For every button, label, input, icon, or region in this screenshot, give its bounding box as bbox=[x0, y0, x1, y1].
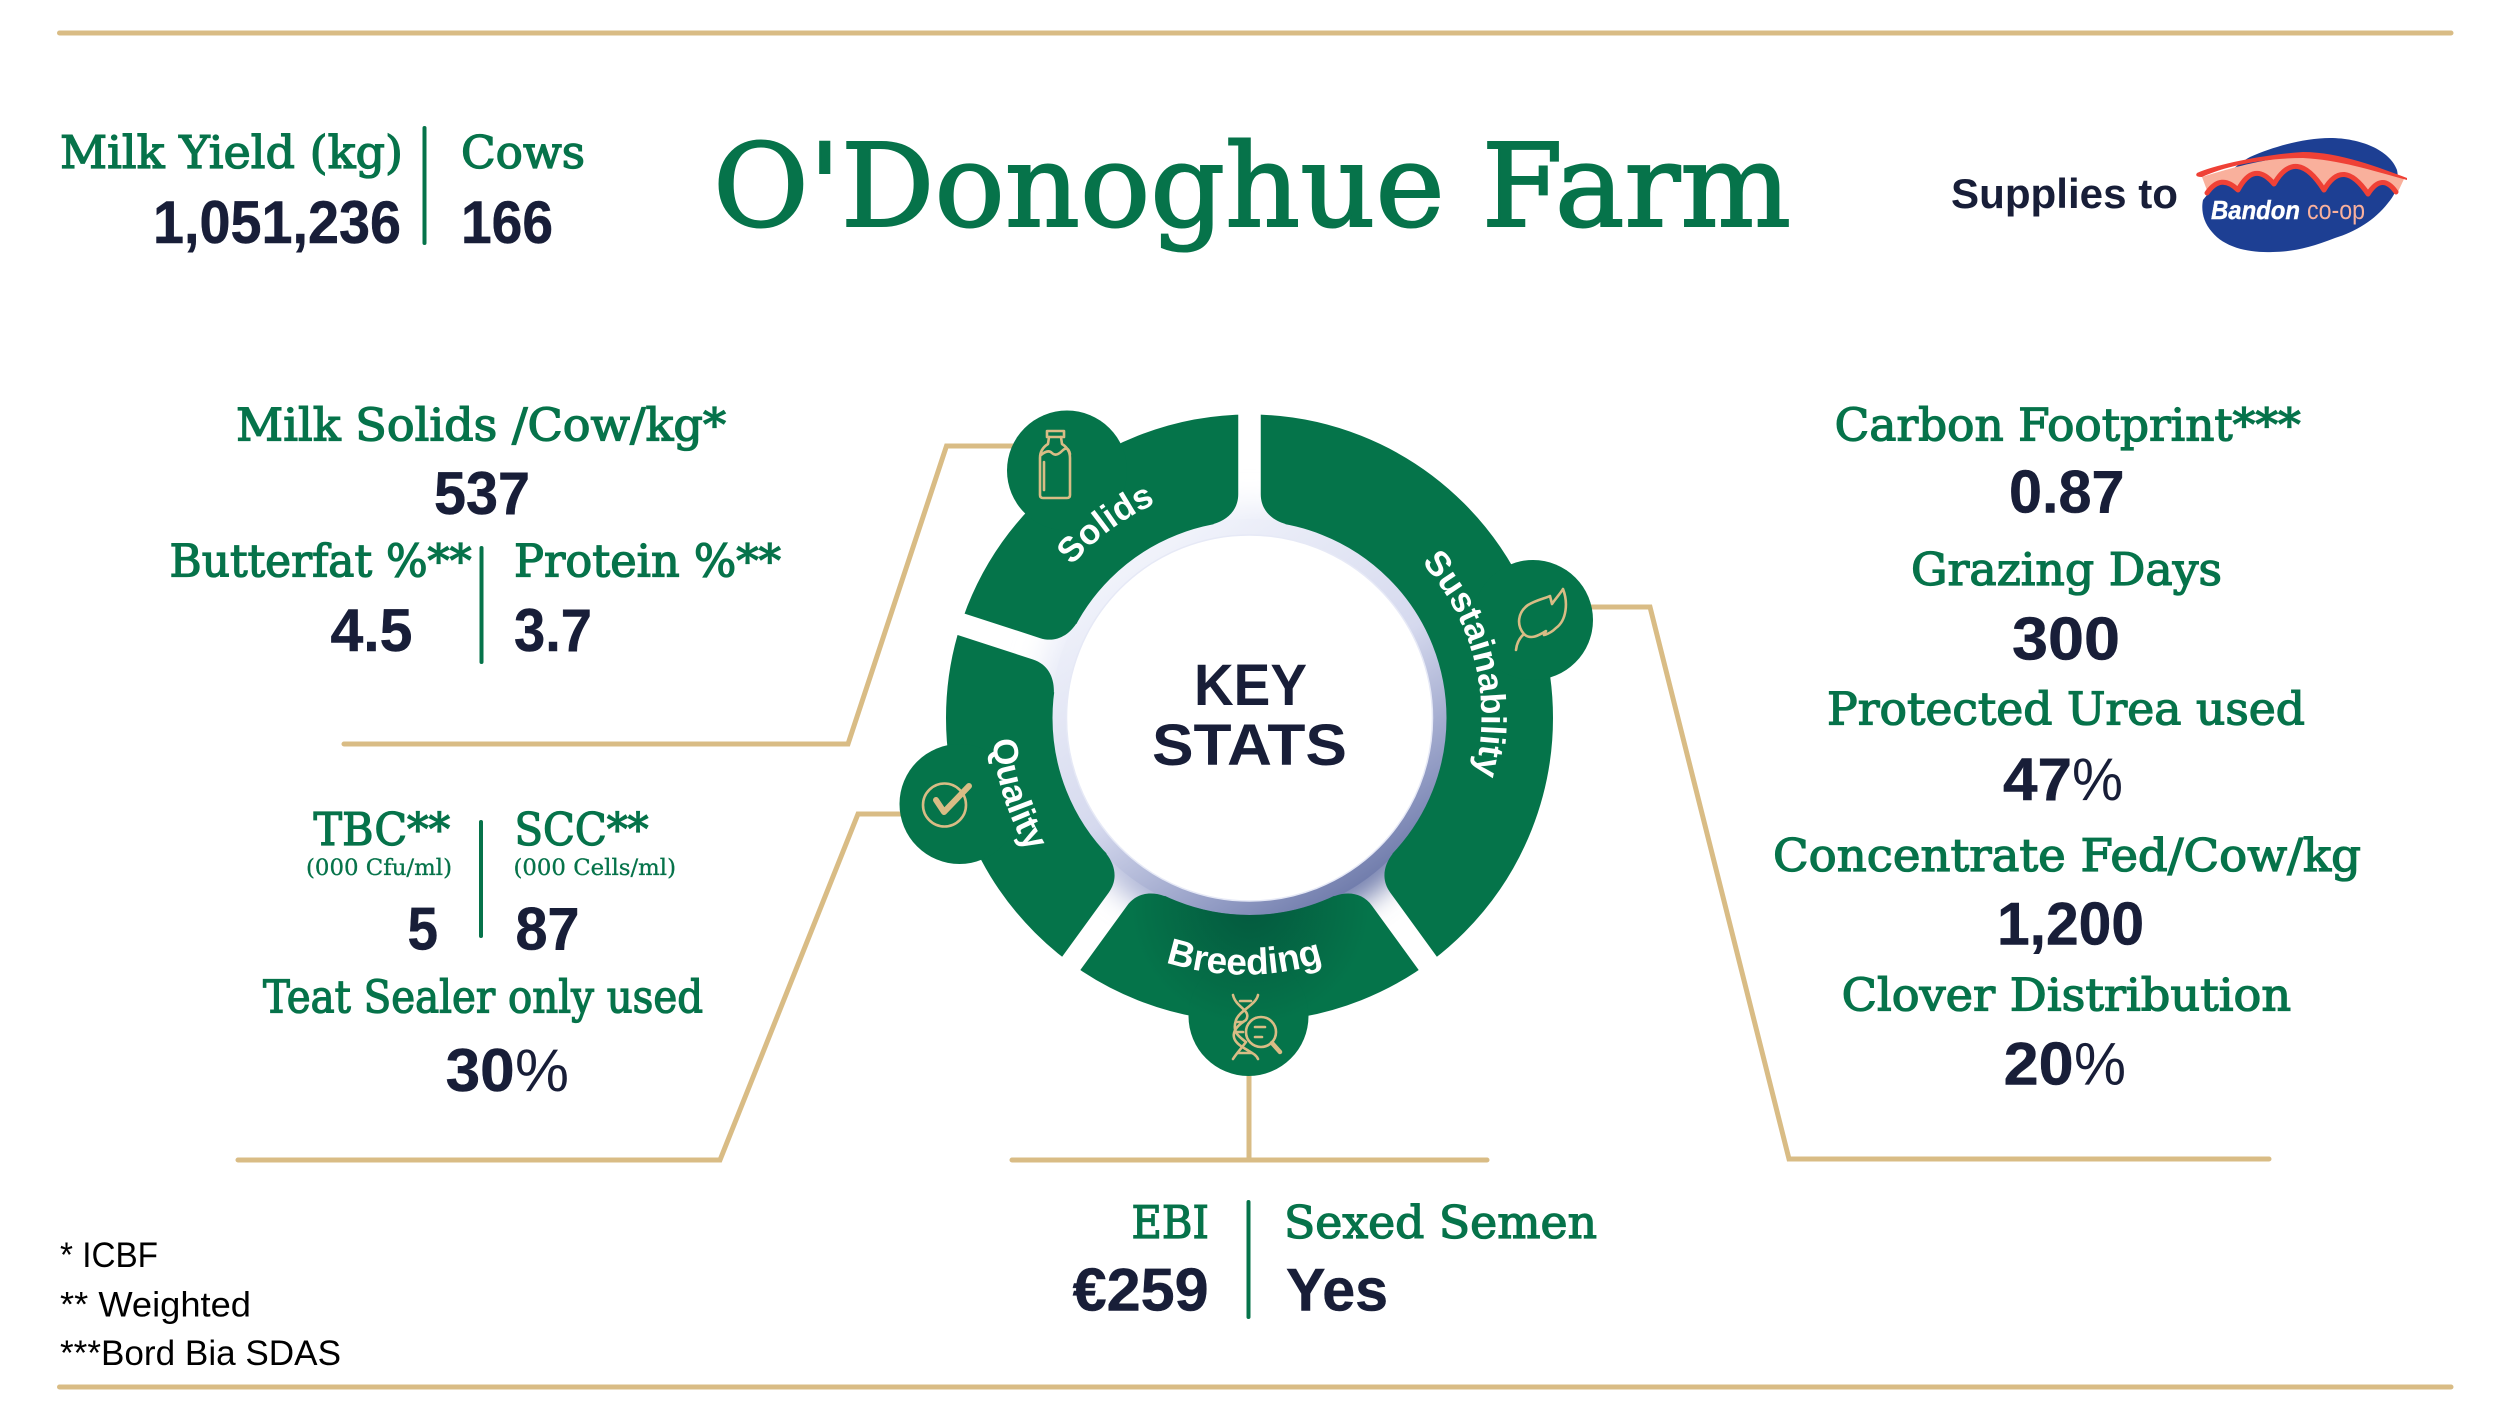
stat: butterfat: Butterfat %** bbox=[170, 534, 472, 588]
stat: SCC: (000 Cells/ml) bbox=[514, 856, 676, 881]
top rule bbox=[60, 30, 2451, 36]
stat: SCC bbox=[514, 803, 676, 962]
panel: sustainability bbox=[1773, 399, 2361, 1097]
stat: TBC: (000 Cfu/ml) bbox=[306, 856, 452, 881]
stat: cows: 166 bbox=[461, 189, 553, 256]
stat: concentrate fed bbox=[1773, 829, 2361, 957]
stat: protected urea: Protected Urea used bbox=[1827, 682, 2305, 735]
stat: EBI: €259 bbox=[1073, 1257, 1209, 1324]
logo: Bandon co-op: Bandon bbox=[2211, 195, 2300, 225]
stat: teat sealer: % bbox=[515, 1037, 569, 1104]
footnotes: ** Weighted bbox=[60, 1286, 251, 1325]
stat: milk solids per cow bbox=[236, 399, 726, 527]
connector: quality bbox=[238, 814, 920, 1160]
stat: grazing days bbox=[1911, 543, 2222, 672]
stat: sexed semen bbox=[1284, 1196, 1597, 1324]
centre disc bbox=[1066, 535, 1432, 901]
segment label: sustainability: Sustainability bbox=[1425, 551, 1507, 778]
stat: protected urea bbox=[1827, 682, 2305, 813]
centre label: key stats bbox=[1152, 653, 1347, 778]
stat: clover distribution: Clover Distribution bbox=[1842, 969, 2291, 1022]
stat: EBI bbox=[1073, 1196, 1209, 1324]
stat: grazing days: Grazing Days bbox=[1911, 543, 2222, 596]
stat: milk yield bbox=[60, 126, 403, 256]
panel: solids bbox=[170, 399, 781, 664]
connector: solids bbox=[344, 446, 1020, 744]
centre label: key stats: KEY bbox=[1194, 653, 1307, 718]
footnotes bbox=[60, 1236, 341, 1373]
stat: teat sealer: Teat Sealer only used bbox=[263, 970, 703, 1023]
wheel shading bbox=[1034, 503, 1464, 933]
stat: clover distribution bbox=[1842, 969, 2291, 1097]
stat: sexed semen: Yes bbox=[1286, 1257, 1388, 1324]
stat: milk solids per cow: Milk Solids /Cow/kg* bbox=[236, 399, 726, 452]
stat: cows: Cows bbox=[461, 126, 585, 179]
icon: leaf bbox=[1516, 589, 1566, 650]
segment label: quality: Quality bbox=[988, 740, 1044, 846]
stat: TBC: 5 bbox=[408, 895, 438, 962]
stat: TBC bbox=[306, 803, 452, 962]
header stats: milk yield and cows bbox=[60, 126, 585, 256]
stat: protein: Protein %** bbox=[514, 534, 781, 588]
icon: check mark bbox=[923, 784, 969, 826]
footnotes: * ICBF bbox=[60, 1236, 158, 1275]
stat: cows bbox=[461, 126, 585, 256]
bottom rule bbox=[60, 1384, 2451, 1390]
stat: clover distribution: % bbox=[2074, 1030, 2126, 1097]
stat: concentrate fed: 1,200 bbox=[1997, 890, 2144, 957]
stat: milk yield: Milk Yield (kg) bbox=[60, 126, 403, 179]
segment label: breeding: Breeding bbox=[1168, 938, 1322, 975]
stat: butterfat: 4.5 bbox=[330, 597, 412, 664]
segment label: solids: Solids bbox=[1058, 490, 1152, 562]
stat: SCC: SCC** bbox=[514, 803, 648, 856]
stat: protected urea: 47 bbox=[2003, 746, 2072, 813]
stat: concentrate fed: Concentrate Fed/Cow/kg bbox=[1773, 829, 2361, 882]
stat: milk solids per cow: 537 bbox=[434, 460, 530, 527]
stat: SCC: 87 bbox=[516, 895, 580, 962]
stat: TBC: TBC** bbox=[314, 803, 450, 856]
logo: Bandon co-op: co-op bbox=[2307, 195, 2365, 225]
supplies to Bandon co-op bbox=[1951, 138, 2407, 252]
stat: carbon footprint bbox=[1835, 399, 2301, 525]
stat: butterfat bbox=[170, 534, 472, 664]
stat: carbon footprint: Carbon Footprint*** bbox=[1835, 399, 2301, 452]
footnotes: ***Bord Bia SDAS bbox=[60, 1334, 341, 1373]
green ring segments with icon bumps bbox=[900, 410, 1593, 1076]
icon: dna and magnifier bbox=[1233, 995, 1280, 1059]
stat: EBI: EBI bbox=[1132, 1196, 1209, 1249]
connector: breeding bbox=[1012, 1060, 1487, 1160]
panel: breeding bbox=[1073, 1196, 1597, 1324]
supplies label: Supplies to bbox=[1951, 170, 2178, 217]
stat: sexed semen: Sexed Semen bbox=[1284, 1196, 1597, 1249]
stat: protein bbox=[514, 534, 781, 664]
logo: Bandon co-op bbox=[2196, 138, 2407, 252]
stat: teat sealer: 30 bbox=[446, 1037, 515, 1104]
stat: teat sealer bbox=[263, 970, 703, 1104]
stat: protein: 3.7 bbox=[514, 597, 592, 664]
stat: milk yield: 1,051,236 bbox=[153, 189, 401, 256]
key stats wheel bbox=[900, 410, 1593, 1076]
connector: sustainability bbox=[1580, 607, 2269, 1159]
stat: carbon footprint: 0.87 bbox=[2009, 458, 2124, 525]
stat: protected urea: % bbox=[2072, 746, 2123, 813]
stat: clover distribution: 20 bbox=[2004, 1030, 2074, 1097]
stat: grazing days: 300 bbox=[2012, 605, 2120, 672]
icon: milk bottle bbox=[1040, 431, 1070, 498]
panel: quality bbox=[263, 803, 703, 1104]
centre label: key stats: STATS bbox=[1152, 713, 1347, 778]
title: O'Donoghue Farm bbox=[713, 120, 1791, 254]
